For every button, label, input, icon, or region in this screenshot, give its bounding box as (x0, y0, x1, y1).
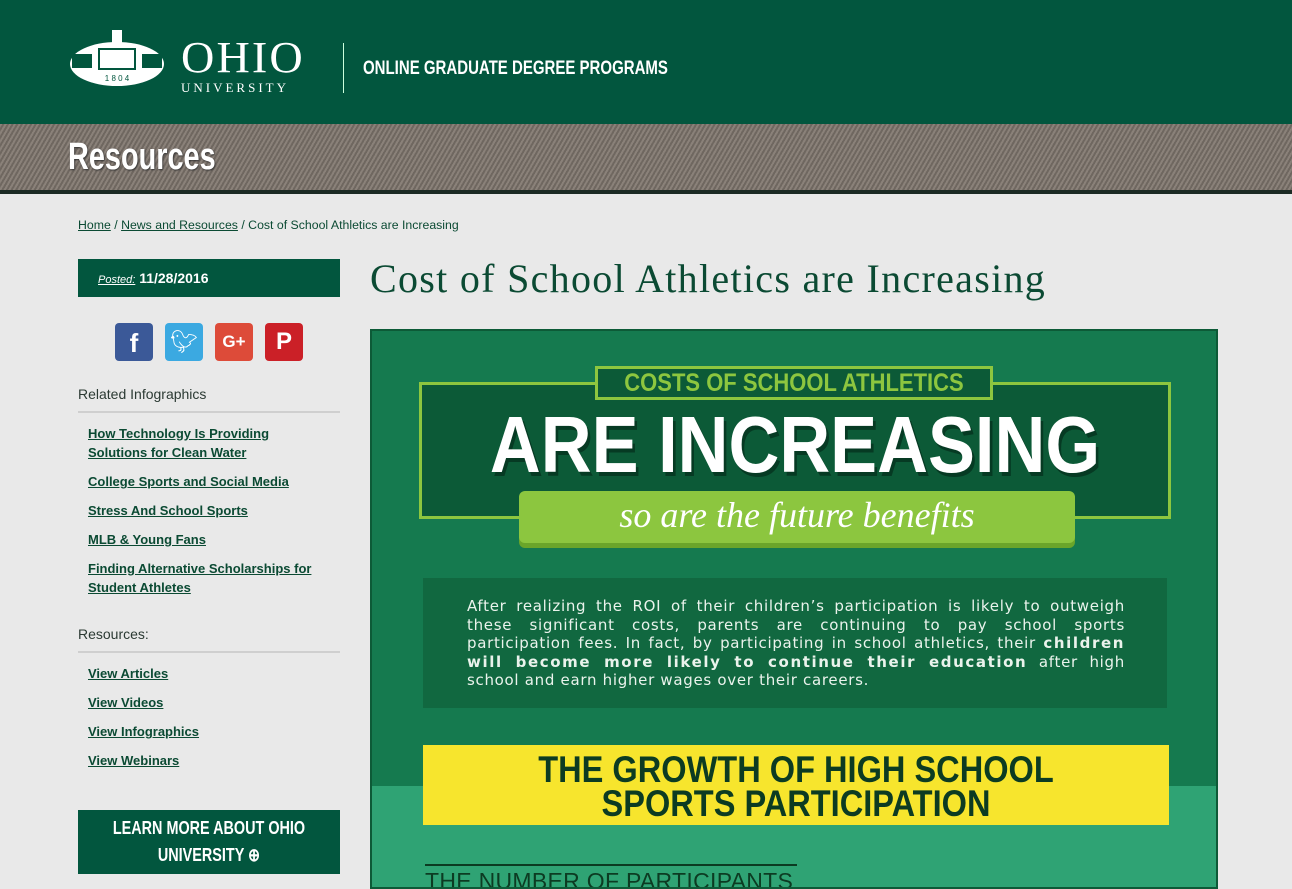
posted date: Posted: 11/28/2016 (98, 270, 208, 286)
resources list: Resources: (78, 626, 149, 642)
social icons: G+ (222, 332, 246, 351)
logo: wordmark: UNIVERSITY (181, 80, 289, 95)
section heading: SPORTS PARTICIPATION (602, 783, 990, 824)
learn more button: LEARN MORE ABOUT OHIO (113, 818, 305, 838)
social icons: P (276, 328, 292, 355)
text: View Infographics (88, 724, 199, 739)
text: View Articles (88, 666, 168, 681)
intro text box (423, 578, 1167, 708)
posted date (78, 259, 340, 297)
text: View Webinars (88, 753, 179, 768)
section heading: THE GROWTH OF HIGH SCHOOL (538, 749, 1054, 790)
text: How Technology Is Providing (88, 426, 269, 441)
text: College Sports and Social Media (88, 474, 289, 489)
resources banner (0, 124, 1292, 194)
text: Student Athletes (88, 580, 191, 595)
text: MLB & Young Fans (88, 532, 206, 547)
social icons (115, 323, 303, 361)
infographic (370, 329, 1218, 889)
page title: Cost of School Athletics are Increasing (370, 256, 1046, 301)
header tagline: ONLINE GRADUATE DEGREE PROGRAMS (363, 58, 668, 79)
main headline: ARE INCREASING (490, 400, 1100, 489)
banner heading: Resources (68, 136, 216, 178)
text: View Videos (88, 695, 163, 710)
subtitle pill: so are the future benefits (619, 495, 975, 535)
title banner (419, 382, 1171, 519)
learn more button: UNIVERSITY ⊕ (158, 845, 260, 865)
breadcrumb: Home / News and Resources / Cost of School Athletics are Increasing (78, 218, 459, 232)
social icons: f (130, 328, 138, 358)
header bar (0, 0, 1292, 124)
top label: COSTS OF SCHOOL ATHLETICS (624, 369, 964, 397)
logo: seal: 1 8 0 4 (105, 74, 130, 83)
section heading (423, 745, 1169, 825)
social icons: 🐦︎ (170, 329, 198, 354)
related infographics: Related Infographics (78, 386, 206, 402)
learn more button (78, 810, 340, 874)
logo: seal (70, 30, 164, 86)
logo: wordmark: OHIO (181, 33, 305, 82)
subtitle pill (519, 491, 1075, 543)
text: Stress And School Sports (88, 503, 248, 518)
text: Finding Alternative Scholarships for (88, 561, 311, 576)
text: Solutions for Clean Water (88, 445, 246, 460)
intro text box: After realizing the ROI of their children’s participation is likely to outweigh these significant costs, parents are continuing to pay school sports participation fees. In fact, by participating in school athletics, their children will become more likely to continue their education after high school and earn higher wages over their careers. (467, 597, 1125, 689)
